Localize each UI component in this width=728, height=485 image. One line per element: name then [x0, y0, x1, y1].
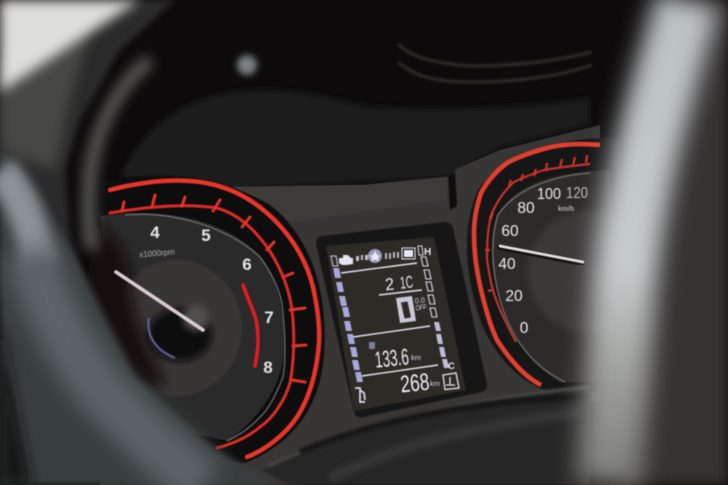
cold marker: C	[448, 361, 455, 372]
foreground: left dark trim	[0, 0, 175, 300]
temperature readout: 1C	[399, 272, 414, 293]
tach numerals: 8	[263, 358, 273, 377]
hot marker	[418, 246, 431, 258]
speedometer centre zone	[528, 210, 652, 334]
tach hub	[183, 305, 209, 331]
spoke dark body	[625, 0, 728, 485]
speedometer numerals: 100	[537, 186, 561, 203]
speedometer numerals: 20	[505, 288, 523, 305]
speedometer needle	[500, 247, 582, 263]
tach numerals: 7	[264, 308, 274, 327]
foreground: top left light trim	[0, 0, 140, 92]
range reading: km	[430, 379, 440, 388]
LCD contents	[331, 246, 459, 402]
tachometer	[85, 176, 325, 463]
tach centre zone	[112, 260, 242, 396]
auto off label: 0.0	[414, 296, 425, 306]
tach needle	[116, 272, 203, 330]
tach hub shadow	[148, 309, 212, 361]
right bar gauge	[421, 257, 449, 368]
speedometer numerals: 40	[498, 256, 516, 273]
hood indicator blob	[237, 55, 257, 75]
tach numerals	[150, 223, 274, 377]
auto off label	[414, 295, 427, 312]
tach numerals: 6	[242, 255, 252, 274]
divider lines	[341, 263, 438, 376]
visor recess	[120, 90, 590, 190]
range reading: 268	[399, 369, 431, 398]
odometer reading: 133.6	[374, 343, 410, 373]
speedometer inner red ring	[487, 164, 590, 342]
tach numerals: 4	[150, 223, 160, 242]
left bar gauge	[331, 256, 363, 382]
foreground: wheel rim pale edge	[0, 170, 40, 265]
upper panel strip shade	[233, 177, 447, 222]
hood ridges	[398, 44, 592, 82]
speedometer numerals: 80	[517, 200, 535, 217]
speedometer	[467, 138, 652, 392]
speedometer numerals	[498, 185, 588, 337]
tach numerals: 5	[201, 226, 211, 245]
fuel icon	[355, 388, 365, 402]
big gear digit	[396, 296, 416, 323]
speedometer outer red ring	[474, 144, 600, 385]
tach grey scale edge	[125, 214, 285, 441]
speed unit label: km/h	[558, 206, 574, 213]
speedometer black surround	[467, 138, 620, 392]
temperature readout: 2	[384, 274, 395, 294]
tach outer red ring	[110, 180, 319, 457]
foreground: wheel rim highlight	[30, 250, 205, 485]
tach black surround	[90, 176, 325, 463]
LCD screen	[326, 237, 466, 411]
tach inner red ring	[110, 206, 294, 448]
LCD display	[316, 222, 487, 417]
foreground: steering wheel spoke	[608, 0, 728, 485]
auto off label: OFF	[415, 302, 427, 312]
foreground: dark lower left corner	[0, 320, 32, 485]
tach ticks	[122, 195, 306, 382]
temperature readout	[384, 272, 414, 294]
speedometer numerals: 120	[566, 185, 588, 202]
speedometer dial face	[492, 170, 620, 382]
speedometer numerals: 60	[501, 223, 519, 240]
speedometer grey edge	[493, 173, 590, 382]
coolant icon	[443, 373, 459, 390]
redline arc	[243, 285, 258, 366]
odometer reading: km	[411, 353, 421, 362]
spoke bright band	[608, 0, 688, 485]
cluster panel	[100, 125, 600, 485]
speedometer ticks	[485, 155, 587, 291]
tach dial face	[100, 213, 284, 441]
foreground: wheel rim body	[0, 145, 275, 485]
trip icon	[369, 342, 375, 349]
foreground: visor edge highlight	[89, 60, 150, 250]
tach hub blue reflection	[148, 318, 175, 358]
rpm unit label: x1000rpm	[139, 247, 175, 260]
panel slit	[448, 172, 457, 210]
warning icons row	[339, 248, 415, 265]
foreground: left grey trim	[0, 30, 90, 170]
tach left shadow	[85, 225, 165, 400]
hot marker: H	[424, 247, 431, 258]
speedometer numerals: 0	[520, 320, 529, 337]
lower dash rim	[262, 386, 590, 485]
LCD bezel	[316, 222, 487, 417]
